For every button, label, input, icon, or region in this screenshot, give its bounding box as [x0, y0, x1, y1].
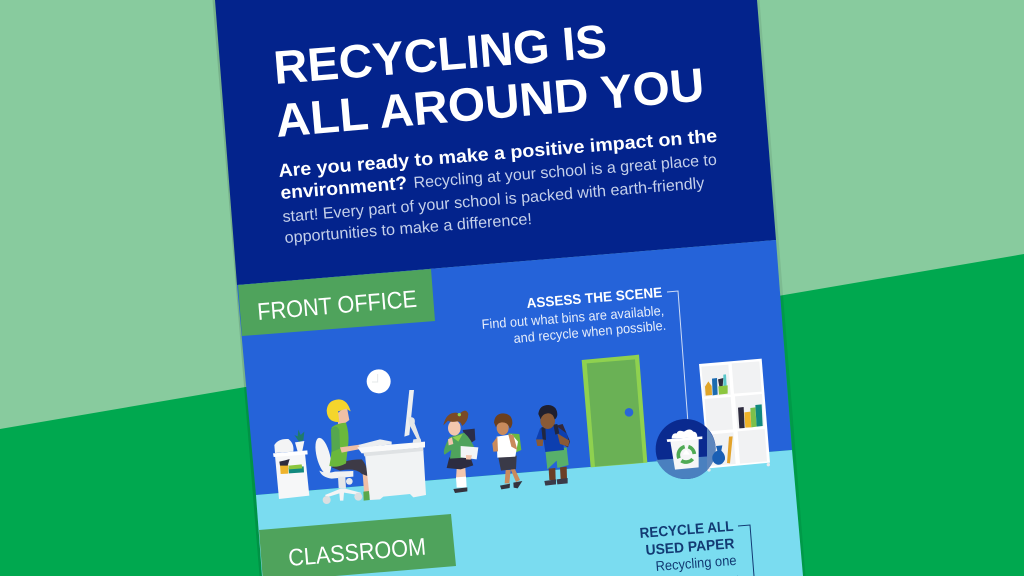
- front office wall: [237, 240, 792, 495]
- callout: recycle all used paper: USED PAPER: [645, 536, 736, 559]
- poster page: [215, 0, 803, 576]
- callout leader line: [667, 291, 688, 423]
- clock: [367, 369, 391, 393]
- callout: assess the scene: ASSESS THE SCENE: [526, 284, 663, 311]
- intro text: Are you ready to make a positive impact on the: [278, 125, 718, 181]
- intro text: [278, 125, 718, 247]
- bookshelf: [699, 359, 770, 472]
- floor: [256, 450, 803, 576]
- pupil: boy in white shirt: [492, 413, 522, 489]
- pupil: girl with books: [443, 411, 478, 493]
- office worker: [327, 399, 370, 501]
- section label: front office: FRONT OFFICE: [256, 286, 418, 326]
- callout: assess the scene: [481, 284, 667, 346]
- icon: blue vase: [712, 445, 725, 465]
- title: ALL AROUND YOU: [273, 57, 706, 147]
- callout leader line: paper: [738, 525, 754, 576]
- pupil: boy in navy shirt: [536, 405, 570, 486]
- cabinet with supplies: [273, 430, 309, 499]
- intro text: environment?: [280, 172, 408, 203]
- office chair: [312, 436, 362, 504]
- desk and computer: [357, 390, 426, 500]
- callout: assess the scene: and recycle when possible.: [513, 318, 667, 346]
- title: [272, 14, 706, 147]
- intro text: Recycling at your school is a great place to: [413, 152, 718, 192]
- callout: recycle all used paper: [639, 519, 739, 576]
- callout: assess the scene: Find out what bins are available,: [481, 303, 665, 332]
- intro text: start! Every part of your school is packed with earth-friendly: [282, 175, 705, 226]
- intro text: opportunities to make a difference!: [284, 211, 533, 247]
- callout: recycle all used paper: RECYCLE ALL: [639, 519, 734, 542]
- icon: recycling bin in circle: [656, 419, 716, 479]
- door: [582, 355, 647, 467]
- callout: recycle all used paper: Recycling one: [655, 552, 737, 574]
- header panel navy: [215, 0, 776, 285]
- title: RECYCLING IS: [272, 14, 609, 94]
- section label: classroom: CLASSROOM: [287, 534, 427, 572]
- section label: classroom: [259, 514, 456, 576]
- section label: front office: [238, 269, 435, 336]
